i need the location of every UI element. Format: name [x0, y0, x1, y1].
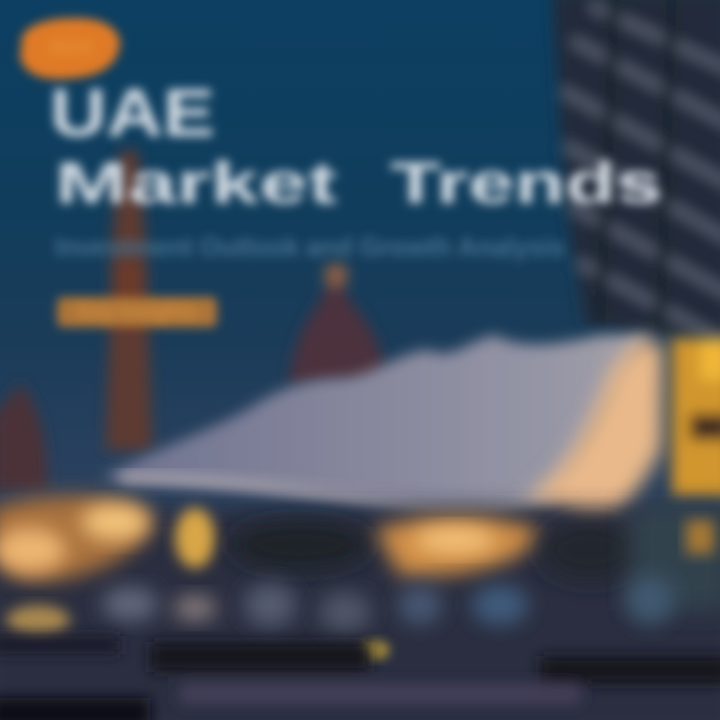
orange label: Key Insights: [78, 301, 196, 323]
warm highlight on chart edge: [525, 338, 664, 538]
badge: 2024: [48, 37, 93, 59]
lower city band: [0, 510, 720, 720]
landmark: tall tower: [106, 150, 152, 450]
landmark: left dome: [0, 382, 48, 490]
title: Market: [55, 151, 337, 216]
badge: [20, 18, 120, 79]
subtitle: Investment Outlook and Growth Analysis: [55, 232, 565, 262]
orange label: [57, 297, 217, 327]
building: right tower: [552, 0, 720, 345]
title: [50, 75, 662, 216]
landmark: dome: [290, 263, 386, 385]
building: right glowing panel: [672, 338, 720, 498]
chart lower swoosh: [120, 478, 550, 511]
title: UAE: [50, 75, 215, 151]
city lights: [0, 496, 720, 660]
title: Trends: [390, 151, 662, 216]
foreground dark street: [0, 636, 720, 720]
area chart silhouette: [100, 335, 650, 505]
